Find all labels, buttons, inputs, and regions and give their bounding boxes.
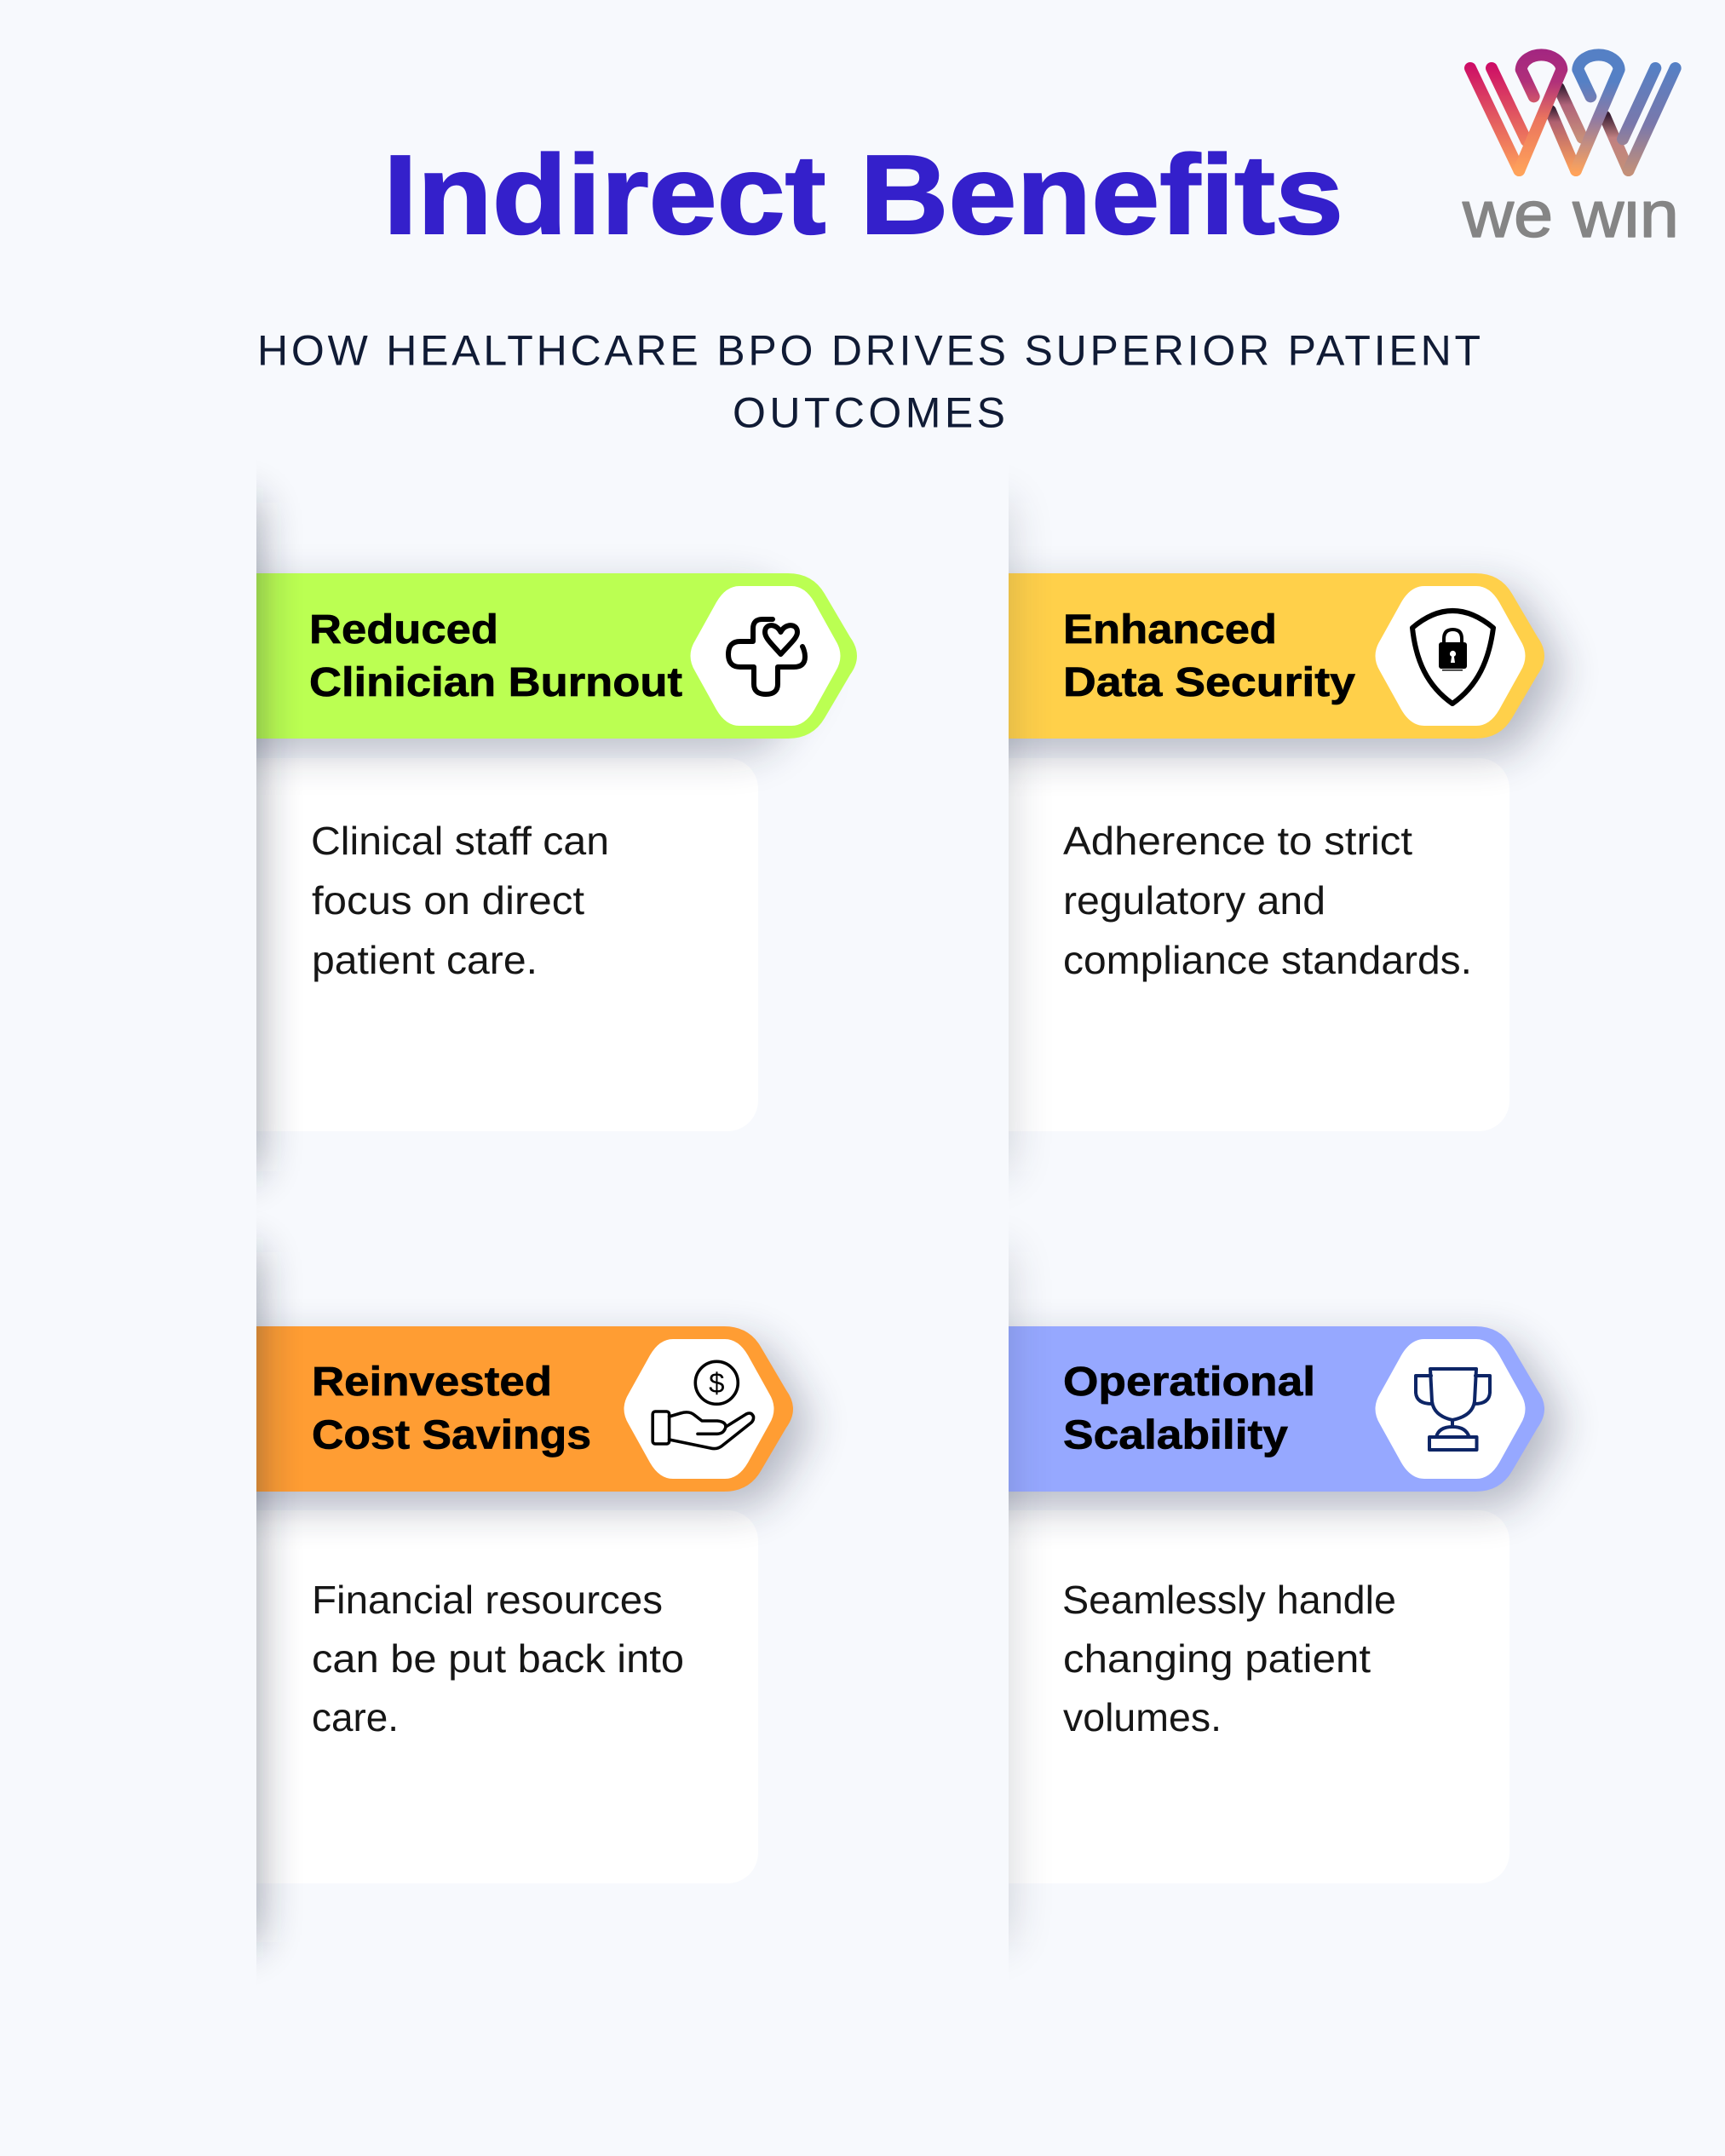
description card	[222, 1510, 758, 1883]
heading: Scalability	[1063, 1412, 1288, 1458]
banner	[1009, 1326, 1544, 1492]
heading: Reinvested	[312, 1360, 552, 1405]
banner shadow	[204, 587, 812, 752]
banner	[256, 1326, 793, 1492]
heading	[1063, 1360, 1315, 1458]
description text	[1063, 819, 1472, 982]
description text: Adherence to strict	[1063, 819, 1412, 863]
icon badge	[690, 586, 840, 726]
description text: Financial resources	[312, 1578, 663, 1622]
panel: operational scalability	[952, 1252, 1560, 1942]
description text: volumes.	[1063, 1695, 1222, 1739]
description text: Clinical staff can	[311, 819, 609, 863]
heading: Data Security	[1063, 660, 1355, 705]
heading: Enhanced	[1063, 607, 1277, 653]
logo wordmark: we win	[1462, 178, 1679, 251]
icon: shield with padlock	[1412, 611, 1493, 704]
description card	[975, 758, 1509, 1131]
logo mark	[1470, 55, 1676, 170]
description text: patient care.	[312, 938, 538, 982]
heading: Operational	[1063, 1360, 1315, 1405]
icon badge	[624, 1339, 773, 1479]
description text	[1062, 1578, 1396, 1739]
edge shadow	[1009, 495, 1027, 1179]
description text: changing patient	[1063, 1636, 1371, 1681]
heading	[312, 1360, 591, 1458]
icon: medical cross with heart	[728, 619, 805, 694]
description text: care.	[312, 1695, 399, 1739]
heading	[1063, 607, 1355, 705]
panel: reinvested cost savings	[201, 1252, 808, 1942]
heading: Clinician Burnout	[309, 660, 682, 705]
edge shadow	[256, 1230, 287, 1964]
panel: reduced clinician burnout	[204, 503, 857, 1171]
heading	[310, 613, 682, 697]
icon: hand holding coin: $	[709, 1367, 724, 1399]
description text: can be put back into	[312, 1636, 684, 1681]
description card	[975, 1510, 1509, 1883]
banner shadow	[201, 1342, 808, 1507]
icon badge	[1375, 586, 1525, 726]
heading: Reduced	[309, 607, 498, 653]
description text	[313, 1584, 682, 1731]
description card	[222, 758, 758, 1131]
banner	[1009, 573, 1544, 739]
banner shadow	[952, 1342, 1560, 1507]
banner shadow	[952, 589, 1560, 754]
subtitle	[257, 327, 1481, 436]
title: Indirect Benefits	[383, 132, 1343, 257]
logo: we win	[1462, 55, 1679, 251]
subtitle: HOW HEALTHCARE BPO DRIVES SUPERIOR PATIENT	[257, 327, 1481, 375]
description text: focus on direct	[312, 878, 584, 923]
banner	[256, 573, 857, 739]
description text: regulatory and	[1063, 878, 1325, 923]
description text: compliance standards.	[1063, 938, 1472, 982]
panel: enhanced data security	[952, 503, 1560, 1171]
icon: trophy	[1416, 1369, 1490, 1450]
description text: Seamlessly handle	[1062, 1578, 1396, 1622]
icon badge	[1375, 1339, 1525, 1479]
icon: hand holding coin	[653, 1361, 754, 1449]
edge shadow	[256, 480, 287, 1193]
subtitle: OUTCOMES	[733, 388, 1005, 436]
description text	[311, 819, 609, 982]
edge shadow	[1009, 1245, 1027, 1950]
heading: Cost Savings	[312, 1412, 591, 1458]
